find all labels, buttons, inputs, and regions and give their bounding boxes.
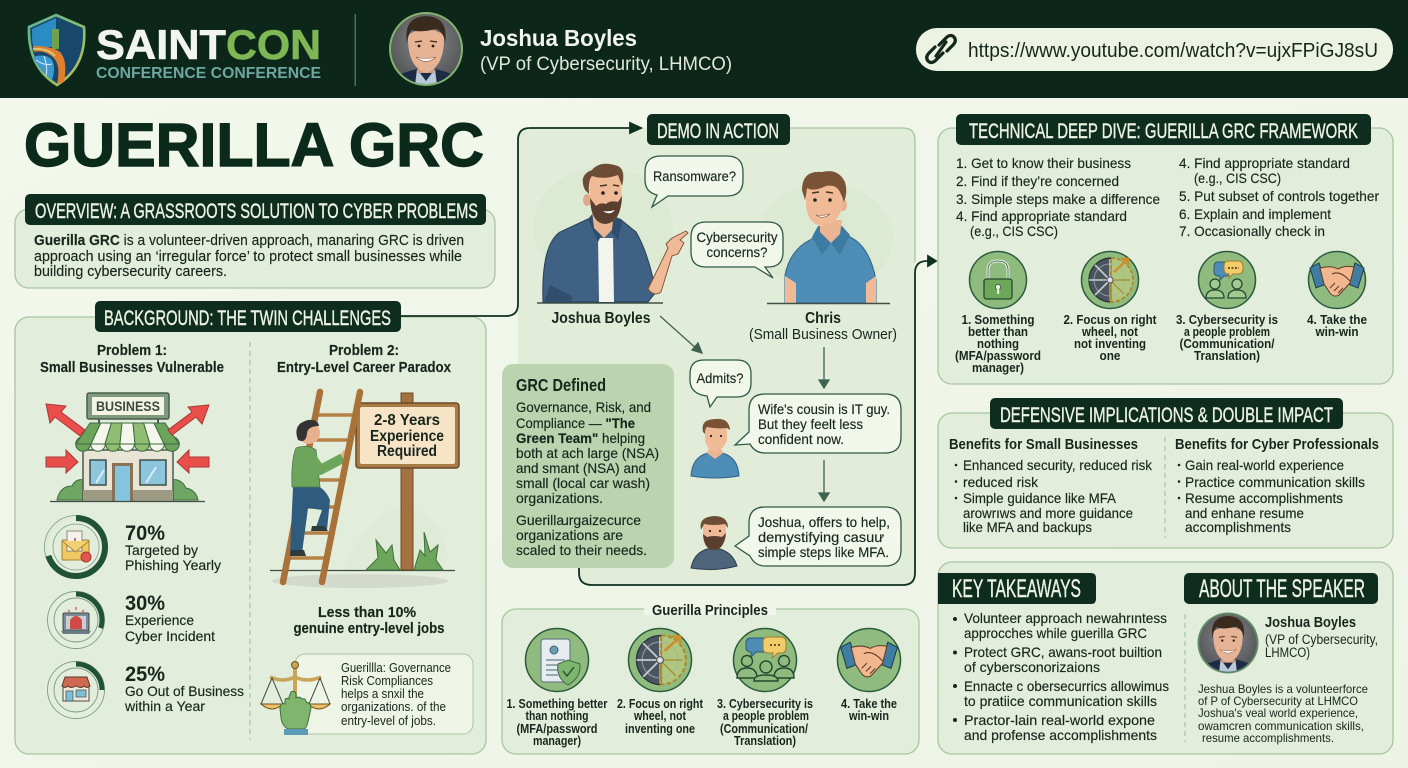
benefits for cyber professionals: and enhane resume bbox=[1185, 505, 1304, 521]
principle 1: than nothing bbox=[526, 709, 588, 723]
stat: 70 percent phishing: Targeted by bbox=[125, 542, 198, 558]
steps list right: 6. Explain and implement bbox=[1179, 206, 1331, 222]
speaker photo bbox=[389, 12, 463, 86]
callout: guerilla governance bbox=[295, 654, 473, 734]
heading: defensive implications bbox=[990, 398, 1343, 429]
callout: guerilla governance: organizations. of the bbox=[341, 700, 446, 714]
problem 1 heading: Small Businesses Vulnerable bbox=[40, 359, 224, 376]
panel: takeaways and speaker bbox=[938, 562, 1393, 754]
takeaways list: approcches while guerilla GRC bbox=[964, 625, 1147, 641]
heading: background: BACKGROUND: THE TWIN CHALLENGES bbox=[104, 306, 391, 330]
bubble: Cybersecurity concerns: concerns? bbox=[706, 244, 768, 260]
bubble: Ransomware: Ransomware? bbox=[653, 168, 736, 184]
stat: 30 percent incident: 30% bbox=[125, 592, 165, 615]
speaker portrait bbox=[1198, 612, 1258, 674]
steps list left: (e.g., CIS CSC) bbox=[970, 223, 1058, 239]
heading: overview: OVERVIEW: A GRASSROOTS SOLUTION TO CYBER PROBLEMS bbox=[35, 199, 478, 223]
stat: 30 percent incident bbox=[48, 592, 215, 648]
framework 2: 2. Focus on right bbox=[1064, 313, 1157, 327]
problem 1 heading bbox=[40, 342, 224, 376]
icon: two people talking bbox=[1206, 261, 1246, 298]
framework 3 bbox=[1176, 252, 1278, 363]
framework 4: win-win bbox=[1315, 325, 1358, 339]
benefits for cyber professionals: Resume accomplishments bbox=[1185, 490, 1343, 506]
framework 1: nothing bbox=[977, 337, 1019, 351]
panel: defensive implications bbox=[938, 398, 1393, 548]
benefits for small businesses: Enhanced security, reduced risk bbox=[963, 457, 1153, 473]
framework 1: 1. Something bbox=[962, 313, 1034, 327]
heading: demo: DEMO IN ACTION bbox=[657, 119, 779, 143]
speaker bio: owamcren communication skills, bbox=[1198, 719, 1364, 733]
sign: 2-8 Years bbox=[374, 412, 440, 429]
callout: GRC defined: Compliance — "The bbox=[516, 415, 635, 431]
speaker bio: resume accomplishments. bbox=[1202, 731, 1334, 745]
bubble: wife's cousin: Wife's cousin is IT guy. bbox=[758, 401, 890, 417]
label: Chris: (Small Business Owner) bbox=[749, 326, 897, 343]
callout: GRC defined: and smant (NSA) and bbox=[516, 460, 646, 476]
principle 1: 1. Something better bbox=[506, 697, 608, 711]
framework 1: better than bbox=[968, 325, 1028, 339]
principle 3: a people problem bbox=[723, 709, 809, 723]
benefits for small businesses: like MFA and backups bbox=[963, 519, 1092, 535]
benefits for cyber professionals: Gain real-world experience bbox=[1185, 457, 1344, 473]
steps list right: (e.g., CIS CSC) bbox=[1194, 170, 1281, 186]
bubble: Admits: Admits? bbox=[696, 370, 744, 386]
illustration: ladder and experience sign bbox=[270, 392, 459, 588]
overview text bbox=[34, 232, 464, 280]
benefits for small businesses: Benefits for Small Businesses bbox=[949, 436, 1138, 453]
icon: scales held by hand bbox=[261, 662, 330, 735]
callout: guerilla governance: Guerillla: Governance bbox=[341, 661, 451, 675]
principle 1 bbox=[506, 628, 608, 748]
callout: guerilla governance: helps a snxil the bbox=[341, 687, 424, 701]
principle 2: inventing one bbox=[625, 722, 695, 736]
stat: 70 percent phishing: 70% bbox=[125, 522, 165, 545]
benefits for small businesses: arowrıws and more guidance bbox=[963, 505, 1133, 521]
icon: laptop alert bbox=[61, 607, 91, 634]
logo wordmark: SAINT bbox=[96, 21, 226, 68]
takeaways list: to pratiice communication skills bbox=[964, 693, 1157, 709]
benefits for cyber professionals: accomplishments bbox=[1185, 519, 1291, 535]
icon: handshake bbox=[1310, 263, 1364, 296]
speaker bio: Jeshua Boyles is a volunteerforce bbox=[1198, 682, 1368, 696]
icon: chain link bbox=[927, 36, 955, 62]
icon: shop bbox=[62, 677, 90, 701]
speaker bio: of P of Cybersecurity at LHMCO bbox=[1198, 694, 1358, 708]
speaker name: (VP of Cybersecurity, LHMCO) bbox=[480, 54, 732, 75]
steps list left: 2. Find if they’re concerned bbox=[956, 173, 1119, 189]
framework 1: (MFA/password bbox=[955, 349, 1041, 363]
takeaways list: of cybersconorizaions bbox=[964, 659, 1100, 675]
icon: handshake bbox=[841, 642, 897, 677]
logo wordmark: CON bbox=[226, 21, 321, 68]
speaker bio: Joshua's veal world experience, bbox=[1198, 706, 1358, 720]
framework 3: Translation) bbox=[1194, 349, 1260, 363]
callout: GRC defined: GRC Defined bbox=[516, 375, 606, 395]
framework 3: (Communication/ bbox=[1180, 337, 1275, 351]
stat: 25 percent closure bbox=[48, 662, 244, 718]
icon: storefront under attack bbox=[46, 393, 209, 502]
framework 3: 3. Cybersecurity is bbox=[1176, 313, 1278, 327]
icon: phishing mail bbox=[62, 531, 91, 562]
icon: storefront under attack: BUSINESS bbox=[96, 399, 160, 414]
bubble: Cybersecurity concerns bbox=[691, 222, 783, 278]
speaker details: LHMCO) bbox=[1265, 645, 1310, 660]
principle 3: 3. Cybersecurity is bbox=[717, 697, 813, 711]
donut 30 percent bbox=[48, 592, 104, 648]
principle 4: 4. Take the bbox=[841, 697, 897, 711]
principle 1: (MFA/password bbox=[516, 722, 598, 736]
callout: guerilla governance: Risk Compliances bbox=[341, 674, 433, 688]
steps list left: 1. Get to know their business bbox=[956, 155, 1131, 171]
steps list left bbox=[956, 155, 1160, 239]
framework 2: wheel, not bbox=[1081, 325, 1139, 339]
steps list right: 4. Find appropriate standard bbox=[1179, 155, 1350, 171]
bubble: Admits bbox=[690, 360, 751, 407]
takeaways list: Practor-lain real-world expone bbox=[964, 712, 1155, 728]
framework 2 bbox=[1064, 252, 1157, 363]
takeaways list: and profense accomplishments bbox=[964, 727, 1157, 743]
framework 1 bbox=[955, 252, 1041, 375]
callout: GRC defined: organizations are bbox=[516, 527, 623, 543]
framework 2: not inventing bbox=[1074, 337, 1146, 351]
callout: GRC defined: organizations. bbox=[516, 490, 603, 506]
steps list left: 4. Find appropriate standard bbox=[956, 208, 1127, 224]
framework 1: manager) bbox=[972, 361, 1024, 375]
speaker details: (VP of Cybersecurity, bbox=[1265, 632, 1378, 647]
benefits for cyber professionals: Benefits for Cyber Professionals bbox=[1175, 436, 1379, 453]
bubble: Joshua offers: demystifying casuư bbox=[758, 529, 884, 545]
callout: GRC defined: Guerillaɹrgaizecurce bbox=[516, 512, 641, 528]
problem 1 heading: Problem 1: bbox=[97, 342, 167, 359]
callout: GRC defined: Governance, Risk, and bbox=[516, 399, 651, 415]
panel: background twin challenges bbox=[15, 301, 486, 754]
bubble: wife's cousin: confident now. bbox=[758, 431, 844, 447]
principle 2: wheel, not bbox=[633, 709, 687, 723]
bubble: wife's cousin: But they feelt less bbox=[758, 416, 863, 432]
logo wordmark: CONFERENCE CONFERENCE bbox=[96, 65, 321, 82]
label: Joshua Boyles: Joshua Boyles bbox=[552, 310, 651, 327]
overview text: building cybersecurity careers. bbox=[34, 263, 227, 280]
overview text: approach using an ‘irregular force’ to protect small businesses while bbox=[34, 248, 462, 265]
icon: clipboard with shield bbox=[541, 639, 580, 685]
stat: 30 percent incident: Experience bbox=[125, 612, 194, 628]
connector: demo to technical deep dive bbox=[579, 256, 936, 585]
label: Chris: Chris bbox=[805, 310, 841, 327]
framework 4 bbox=[1307, 252, 1367, 339]
callout: GRC defined bbox=[502, 364, 674, 568]
steps list left: 3. Simple steps make a difference bbox=[956, 191, 1160, 207]
principle 3: (Communication/ bbox=[720, 722, 808, 736]
callout: GRC defined: scaled to their needs. bbox=[516, 542, 647, 558]
benefits for small businesses: Simple guidance like MFA bbox=[963, 490, 1117, 506]
principle 3: Translation) bbox=[734, 734, 796, 748]
label: Chris bbox=[749, 310, 897, 343]
panel: overview bbox=[15, 194, 495, 288]
icon: wheel bbox=[1089, 258, 1133, 302]
avatar: Joshua bbox=[691, 516, 737, 570]
bubble: Joshua offers: Joshua, offers to help, bbox=[758, 514, 890, 530]
callout: GRC defined: small (local car wash) bbox=[516, 475, 650, 491]
video link pill: https://www.youtube.com/watch?v=ujxFPiGJ8sU bbox=[968, 39, 1378, 62]
heading: principles: Guerilla Principles bbox=[652, 603, 768, 619]
principle 4: win-win bbox=[848, 709, 889, 723]
takeaways list bbox=[953, 610, 1169, 743]
overview text: Guerilla GRC is a volunteer-driven approach, manaring GRC is driven bbox=[34, 232, 464, 249]
problem 2 heading bbox=[277, 342, 452, 376]
sign: Experience bbox=[370, 428, 444, 445]
logo wordmark bbox=[96, 21, 321, 82]
entry-level statistic: genuine entry-level jobs bbox=[294, 620, 444, 637]
principle 4 bbox=[838, 628, 900, 723]
speaker details: Joshua Boyles bbox=[1265, 615, 1356, 631]
connector: background to demo bbox=[401, 123, 641, 316]
bubble: Ransomware bbox=[645, 156, 743, 207]
heading: demo bbox=[647, 114, 790, 145]
stat: 25 percent closure: within a Year bbox=[124, 698, 205, 714]
avatar: Chris bbox=[691, 419, 739, 478]
benefits for cyber professionals: Practice communication skills bbox=[1185, 474, 1365, 490]
person climbing bbox=[290, 420, 350, 556]
framework 3: a people problem bbox=[1184, 325, 1270, 339]
donut 25 percent bbox=[48, 662, 104, 718]
heading: key takeaways bbox=[938, 573, 1096, 604]
arrow: reply to offer bbox=[819, 460, 829, 501]
heading: background bbox=[95, 301, 401, 332]
video link pill bbox=[916, 28, 1393, 71]
bubble: Cybersecurity concerns: Cybersecurity bbox=[696, 229, 778, 245]
callout: GRC defined: both at ach large (NSA) bbox=[516, 445, 659, 461]
bubble: Joshua offers bbox=[735, 507, 901, 566]
callout: GRC defined: Green Team" helping bbox=[516, 430, 645, 446]
principle 1: manager) bbox=[533, 734, 581, 748]
callout: guerilla governance: entry-level of jobs. bbox=[341, 714, 436, 728]
takeaways list: Protect GRC, awans-root builtion bbox=[964, 644, 1162, 660]
speaker name: Joshua Boyles bbox=[480, 25, 637, 51]
stat: 25 percent closure: Go Out of Business bbox=[125, 683, 244, 699]
entry-level statistic: Less than 10% bbox=[318, 604, 416, 621]
arrow: Chris to reply bbox=[819, 347, 829, 388]
figure: Chris bbox=[767, 171, 890, 304]
panel: demo in action bbox=[518, 114, 915, 585]
principle 2: 2. Focus on right bbox=[617, 697, 704, 711]
sign: Required bbox=[377, 443, 437, 460]
panel: guerilla principles bbox=[502, 603, 919, 754]
bubble: Joshua offers: simple steps like MFA. bbox=[758, 544, 889, 560]
problem 2 heading: Problem 2: bbox=[329, 342, 399, 359]
speaker bio bbox=[1198, 682, 1368, 745]
framework 2: one bbox=[1100, 349, 1121, 363]
heading: key takeaways: KEY TAKEAWAYS bbox=[952, 575, 1081, 603]
stat: 30 percent incident: Cyber Incident bbox=[125, 628, 215, 644]
icon: padlock bbox=[984, 261, 1012, 299]
speaker details bbox=[1265, 615, 1378, 660]
entry-level statistic bbox=[294, 604, 444, 637]
sign bbox=[356, 403, 459, 468]
icon: people talking bbox=[737, 637, 794, 681]
header bar bbox=[0, 0, 1408, 98]
panel: technical deep dive bbox=[938, 114, 1393, 384]
steps list right: 7. Occasionally check in bbox=[1179, 223, 1325, 239]
steps list right: 5. Put subset of controls together bbox=[1179, 188, 1379, 204]
donut 70 percent bbox=[44, 516, 108, 578]
arrow: Joshua to Admits bbox=[660, 316, 702, 353]
takeaways list: Volunteer approach newahrıntess bbox=[964, 610, 1167, 626]
benefits for cyber professionals bbox=[1175, 436, 1379, 535]
problem 2 heading: Entry-Level Career Paradox bbox=[277, 359, 452, 376]
benefits for small businesses: reduced risk bbox=[963, 474, 1039, 490]
principle 2 bbox=[617, 628, 704, 736]
framework 4: 4. Take the bbox=[1307, 313, 1367, 327]
title: GUERILLA GRC bbox=[24, 111, 484, 179]
stat: 70 percent phishing: Phishing Yearly bbox=[125, 557, 221, 573]
icon: SAINTCON shield logo bbox=[29, 15, 84, 85]
bubble: wife's cousin bbox=[735, 394, 901, 453]
stat: 70 percent phishing bbox=[44, 516, 221, 578]
principle 3 bbox=[717, 628, 813, 748]
heading: overview bbox=[25, 194, 486, 225]
benefits for small businesses bbox=[949, 436, 1153, 535]
icon: wheel bbox=[636, 635, 686, 685]
takeaways list: Ennacte c obersecurrics allowimus bbox=[964, 678, 1169, 694]
speaker name bbox=[480, 25, 732, 75]
figure: Joshua Boyles bbox=[537, 164, 688, 303]
stat: 25 percent closure: 25% bbox=[125, 663, 165, 686]
steps list right bbox=[1179, 155, 1379, 239]
